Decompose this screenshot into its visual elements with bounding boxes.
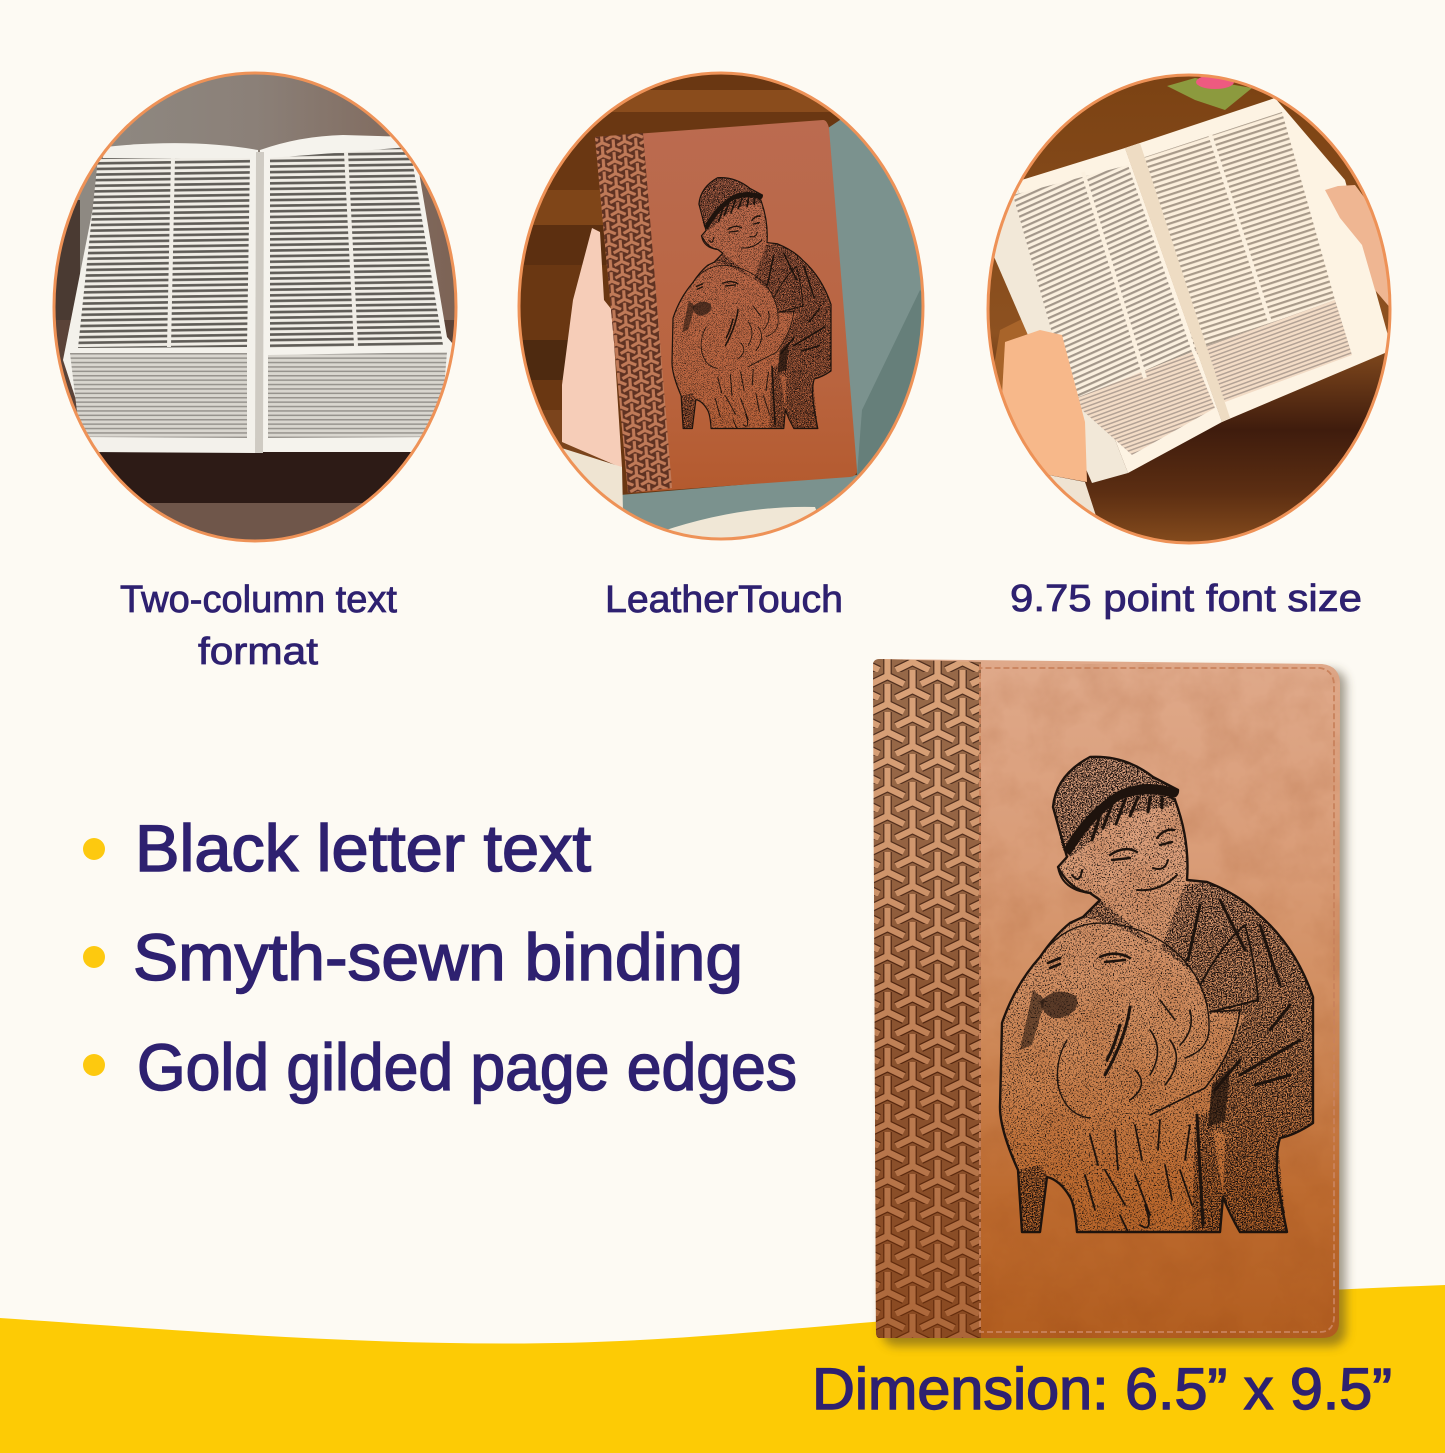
caption: two-column text format: format — [198, 631, 318, 673]
caption: two-column text format: Two-column text — [120, 579, 397, 621]
embossed spine panel — [873, 659, 981, 1338]
dimension label: Dimension: 6.5” x 9.5” — [812, 1357, 1392, 1422]
small leather book — [595, 120, 857, 493]
circle border 1 — [54, 73, 456, 541]
caption: font size: 9.75 point font size — [1010, 578, 1362, 620]
photo: open Bible held in two hands — [980, 70, 1400, 550]
engraved boy and dog portrait — [1000, 757, 1313, 1232]
caption: two-column text format — [120, 579, 397, 673]
photo: open Bible two-column text — [50, 70, 460, 548]
yellow wave footer band — [0, 1285, 1445, 1453]
circle border 2 — [519, 73, 923, 539]
bullet list of features — [83, 811, 797, 1104]
bullet: smyth-sewn binding: Smyth-sewn binding — [133, 920, 743, 994]
large leather Bible cover with engraved portrait — [873, 659, 1346, 1346]
bullet: black letter text: Black letter text — [135, 811, 591, 885]
caption: LeatherTouch: LeatherTouch — [605, 579, 843, 621]
photo: LeatherTouch cover held in hand — [515, 70, 930, 545]
bullet: gold gilded page edges: Gold gilded page edges — [137, 1030, 797, 1104]
circle border 3 — [988, 75, 1390, 543]
